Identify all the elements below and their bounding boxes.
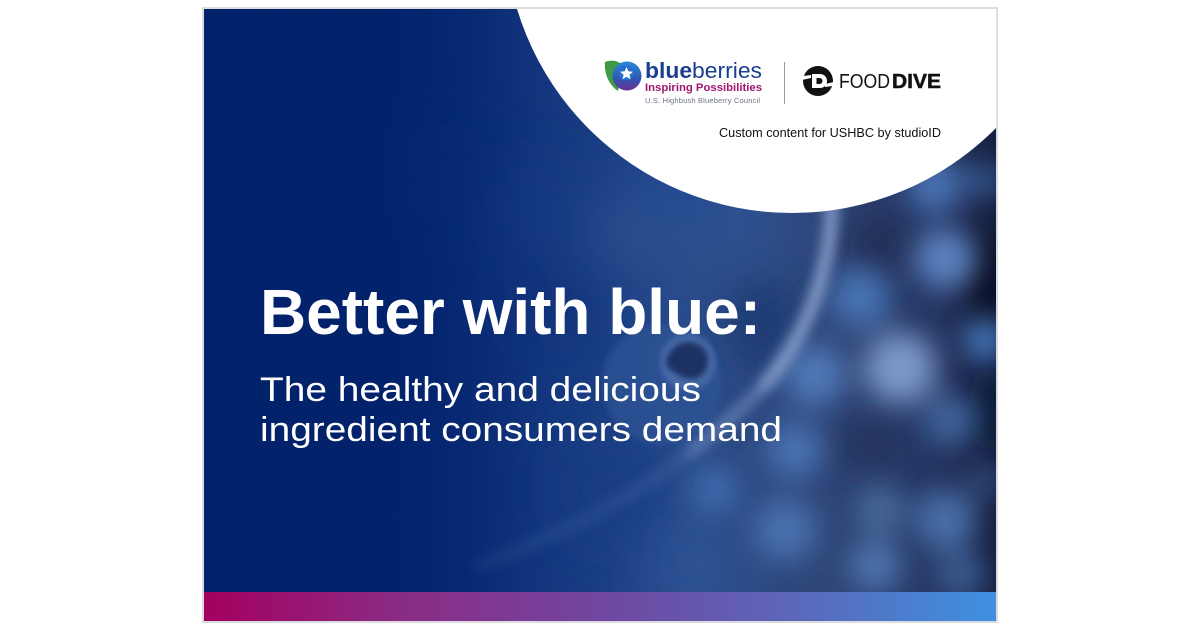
sponsor credit: Custom content for USHBC by studioID bbox=[719, 126, 941, 140]
curved highlight bbox=[480, 205, 832, 565]
wordmark bbox=[839, 71, 941, 93]
icon: berry with star bbox=[605, 61, 642, 91]
blueberries logo bbox=[605, 58, 762, 105]
logo divider bbox=[784, 62, 785, 104]
Food Dive logo bbox=[802, 66, 941, 96]
subtitle bbox=[260, 371, 782, 449]
bokeh berries bbox=[691, 157, 1007, 599]
veil fading photo into navy bbox=[392, 9, 608, 592]
dark shadows bbox=[730, 215, 1006, 467]
tagline: Inspiring Possibilities bbox=[645, 82, 762, 94]
central blueberry bbox=[602, 324, 722, 444]
photo background: blurred blueberries bbox=[204, 9, 1007, 621]
subtitle: ingredient consumers demand bbox=[260, 411, 782, 449]
subtitle: The healthy and delicious bbox=[260, 371, 701, 409]
title: Better with blue: bbox=[260, 276, 761, 348]
wordmark: blueberries bbox=[645, 58, 762, 83]
soft large berries bbox=[607, 200, 782, 588]
gradient footer bar bbox=[204, 592, 996, 621]
panel border bbox=[203, 8, 997, 622]
wordmark: FOOD bbox=[839, 71, 890, 93]
council name: U.S. Highbush Blueberry Council bbox=[645, 96, 760, 105]
wordmark: DIVE bbox=[892, 71, 941, 93]
white header circle bbox=[517, 9, 996, 213]
icon: Food Dive mark bbox=[802, 66, 834, 96]
infographic cover bbox=[202, 7, 998, 623]
